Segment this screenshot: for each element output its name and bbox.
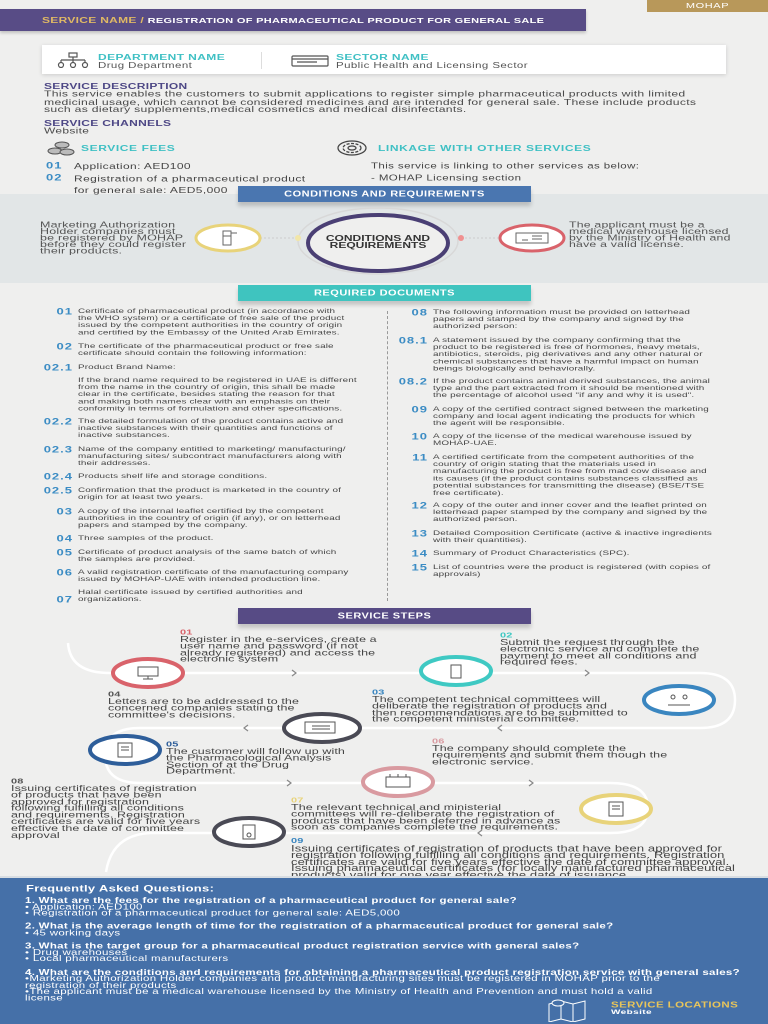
required documents list: organizations. bbox=[78, 596, 142, 603]
step 03: then recommendations are to be submitted to bbox=[372, 708, 628, 717]
required documents list: 13 bbox=[412, 528, 428, 539]
step 09: registration following fulfilling all conditions and requirements. Registration bbox=[291, 850, 725, 860]
required documents list: 05 bbox=[57, 547, 73, 558]
required documents list: 02.4 bbox=[44, 471, 73, 482]
service description bbox=[44, 82, 696, 114]
linkage text: This service is linking to other services as below: bbox=[371, 162, 639, 171]
step 02: payment to meet all conditions and bbox=[500, 651, 697, 660]
fees list: Application: AED100 bbox=[74, 162, 191, 171]
fees list: Registration of a pharmaceutical product bbox=[74, 174, 305, 183]
step 07: 07 bbox=[291, 796, 303, 804]
step 05: the Pharmacological Analysis bbox=[166, 753, 331, 763]
FAQ questions: •Marketing Authorization Holder companies and product manufacturing sites must be registered in MOHAP prior to the bbox=[25, 975, 660, 983]
required documents list: Confirmation that the product is marketed in the country of bbox=[78, 486, 341, 494]
fees list: for general sale: AED5,000 bbox=[74, 185, 228, 195]
required documents list: 07 bbox=[57, 594, 73, 605]
required documents list: A valid registration certificate of the manufacturing company bbox=[78, 568, 348, 576]
linkage text: - MOHAP Licensing section bbox=[371, 174, 521, 182]
step 09: certificates are valid for five years effective the date of committee approval. bbox=[291, 856, 729, 867]
required documents list: 14 bbox=[412, 548, 428, 559]
required documents list: If the brand name required to be registered in UAE is different bbox=[78, 376, 357, 384]
step 08: Issuing certificates of registration bbox=[11, 783, 197, 793]
step 03: the competent ministerial committee. bbox=[372, 714, 579, 724]
left condition text: be registered by MOHAP bbox=[40, 233, 183, 243]
required documents list: 09 bbox=[412, 404, 428, 415]
required documents list: Products shelf life and storage conditions. bbox=[78, 472, 267, 480]
required documents list: country of origin stating that the materials used in bbox=[433, 461, 656, 468]
step 06: 06 bbox=[432, 737, 444, 745]
required documents list: free certificate). bbox=[433, 489, 504, 497]
service locations: Website bbox=[611, 1009, 652, 1016]
service locations bbox=[611, 1001, 738, 1016]
department name bbox=[98, 52, 225, 70]
service steps bar bbox=[238, 608, 531, 624]
icon: org chart bbox=[58, 52, 88, 68]
step 05: Department. bbox=[166, 766, 236, 776]
step 07: committees will re-deliberate the registration of bbox=[291, 809, 554, 819]
fees list: 02 bbox=[46, 172, 62, 183]
required documents list: A copy of the internal leaflet certified by the competent bbox=[78, 507, 324, 515]
required documents list: A copy of the certified contract signed between the marketing bbox=[433, 405, 709, 413]
step 08: approved for registration bbox=[11, 797, 149, 806]
required documents list: If the product contains animal derived substances, the animal bbox=[433, 377, 710, 385]
service channels: Website bbox=[44, 126, 89, 136]
FAQ questions: license bbox=[25, 994, 63, 1003]
required documents list: the percentage of alcohol used "if any and why it is used". bbox=[433, 392, 694, 399]
step 03: 03 bbox=[372, 688, 384, 696]
step 04: Letters are to be addressed to the bbox=[108, 696, 299, 706]
step 08: 08 bbox=[11, 777, 23, 785]
required documents list: A copy of the license of the medical warehouse issued by bbox=[433, 432, 692, 440]
FAQ title: Frequently Asked Questions: bbox=[26, 883, 214, 894]
MOHAP tab bbox=[647, 0, 768, 12]
required documents list: 08.1 bbox=[399, 335, 428, 346]
required documents list: potential substances for transmitting the disease) (BSE/TSE bbox=[433, 482, 704, 490]
step 04: committee's decisions. bbox=[108, 710, 236, 719]
required documents list bbox=[44, 306, 712, 605]
icon: linkage gear bbox=[337, 140, 367, 156]
required documents list: issued by MOHAP-UAE with intended production line. bbox=[78, 576, 320, 583]
step 08 bbox=[11, 777, 200, 840]
required documents list: A certified certificate from the competent authorities of the bbox=[433, 453, 694, 461]
required documents list: clear in the certificate, besides stating the reason for that bbox=[78, 391, 335, 398]
service description: such as dietary supplements,medical cosmetics and medical disinfectants. bbox=[44, 105, 467, 114]
required documents list: their addresses. bbox=[78, 460, 151, 467]
step 03 bbox=[372, 688, 628, 724]
required documents list: 02.3 bbox=[44, 444, 73, 455]
step 05: 05 bbox=[166, 740, 178, 748]
step 01: already registered) and access the bbox=[180, 648, 375, 657]
step 01: 01 bbox=[180, 628, 192, 636]
left condition text: Marketing Authorization bbox=[40, 220, 175, 229]
center label bbox=[326, 234, 430, 250]
required documents list: from the name in the country of origin, this shall be made bbox=[78, 384, 335, 391]
required documents list: manufacturing sites/ subcontract manufacturers along with bbox=[78, 453, 342, 460]
service locations: SERVICE LOCATIONS bbox=[611, 1001, 738, 1009]
step 01: Register in the e-services, create a bbox=[180, 634, 377, 644]
fees list: 01 bbox=[46, 160, 62, 171]
step 02 bbox=[500, 631, 699, 667]
required documents list: manufacturing the product is free from mad cow disease and bbox=[433, 468, 707, 475]
required documents list: type and the part extracted from it should be mentioned with bbox=[433, 385, 704, 392]
left column: 01 bbox=[57, 306, 73, 317]
service channels bbox=[44, 119, 171, 136]
required documents list: product to be registered is free of hormones, heavy metals, bbox=[433, 344, 700, 351]
linkage text bbox=[371, 162, 639, 182]
required documents list: Detailed Composition Certificate (active & inactive ingredients bbox=[433, 529, 712, 537]
required documents list: papers and stamped by the company and signed by the bbox=[433, 316, 684, 323]
required documents list: A copy of the outer and inner cover and the leaflet printed on bbox=[433, 501, 707, 509]
icon: coins bbox=[48, 142, 74, 156]
required documents list: 03 bbox=[57, 506, 73, 517]
step 06: requirements and submit them though the bbox=[432, 750, 667, 760]
required documents list: MOHAP-UAE. bbox=[433, 440, 497, 447]
step 03: The competent technical committees will bbox=[372, 694, 600, 704]
service description: SERVICE DESCRIPTION bbox=[44, 82, 188, 91]
FAQ panel bbox=[0, 876, 768, 1024]
service steps flow bbox=[11, 628, 736, 880]
FAQ questions: registration of their products bbox=[25, 981, 177, 990]
sector name: SECTOR NAME bbox=[336, 52, 429, 62]
required documents list: origin for at least two years. bbox=[78, 494, 203, 501]
step 07: soon as companies complete the requirements. bbox=[291, 822, 558, 832]
title banner: SERVICE NAME / REGISTRATION OF PHARMACEUTICAL PRODUCT FOR GENERAL SALE bbox=[42, 15, 544, 25]
required documents list: 02.1 bbox=[44, 362, 73, 373]
step 07 bbox=[291, 796, 560, 832]
right column: 08 bbox=[412, 307, 428, 318]
step 03: deliberate the registration of products and bbox=[372, 701, 607, 711]
icon: sector card bbox=[291, 55, 329, 67]
FAQ questions bbox=[25, 897, 740, 1003]
step 06: The company should complete the bbox=[432, 743, 626, 753]
required documents bar bbox=[238, 285, 531, 301]
required documents list: beings biologically and behaviorally. bbox=[433, 365, 595, 373]
step 08: certificates are valid for five years bbox=[11, 817, 200, 826]
required documents list: 06 bbox=[57, 567, 73, 578]
required documents list: papers and stamped by the company. bbox=[78, 522, 248, 529]
required documents list: Halal certificate issued by certified authorities and bbox=[78, 588, 303, 596]
department name: DEPARTMENT NAME bbox=[98, 52, 225, 62]
required documents list: inactive substances. bbox=[78, 432, 170, 439]
required documents list: 02.5 bbox=[44, 485, 73, 496]
required documents list: the samples are provided. bbox=[78, 556, 195, 563]
FAQ questions: • Drug warehouses bbox=[25, 949, 127, 957]
step 06: electronic service. bbox=[432, 757, 534, 766]
conditions heading bar bbox=[238, 186, 531, 202]
background band: conditions bbox=[0, 194, 768, 283]
FAQ questions: • Application: AED100 bbox=[25, 903, 143, 911]
MOHAP tab: MOHAP bbox=[686, 2, 729, 10]
required documents list: and making both names clear with an emphasis on their bbox=[78, 398, 330, 405]
required documents list: company and local agent indicating the products for which bbox=[433, 413, 695, 420]
left condition text: their products. bbox=[40, 246, 122, 256]
right condition text: The applicant must be a bbox=[569, 220, 705, 229]
sector name bbox=[336, 52, 528, 70]
required documents list: The certificate of the pharmaceutical product or free sale bbox=[78, 342, 334, 350]
step 04 bbox=[108, 690, 299, 719]
step 08: and requirements. Registration bbox=[11, 810, 185, 820]
required documents list: antibiotics, steroids, pig derivatives and any other natural or bbox=[433, 351, 703, 358]
required documents list: A statement issued by the company confirming that the bbox=[433, 336, 681, 344]
title banner bbox=[0, 9, 586, 31]
required documents list: The following information must be provided on letterhead bbox=[433, 308, 690, 316]
FAQ questions: 1. What are the fees for the registration of a pharmaceutical product for general sale? bbox=[25, 897, 517, 905]
step 02: 02 bbox=[500, 631, 512, 639]
left condition text: Holder companies must bbox=[40, 226, 176, 236]
right condition text bbox=[569, 220, 731, 249]
step 09: 09 bbox=[291, 837, 303, 845]
step 01: user name and password (if not bbox=[180, 641, 358, 651]
step 07: The relevant technical and ministerial bbox=[291, 802, 501, 812]
required documents list: 15 bbox=[412, 562, 428, 573]
step 09: Issuing pharmaceutical certificates (for locally manufactured pharmaceutical bbox=[291, 863, 735, 873]
required documents list: and certified by the Embassy of the United Arab Emirates. bbox=[78, 329, 340, 336]
FAQ questions: 3. What is the target group for a pharmaceutical product registration service with general sales? bbox=[25, 942, 579, 950]
right condition text: by the Ministry of Health and bbox=[569, 233, 731, 243]
linkage heading: LINKAGE WITH OTHER SERVICES bbox=[378, 143, 591, 153]
step 09: products) valid for one year effective the date of issuance. bbox=[291, 870, 630, 880]
required documents list: 11 bbox=[412, 452, 428, 463]
required documents list: Three samples of the product. bbox=[78, 534, 214, 542]
step 08: following fulfilling all conditions bbox=[11, 803, 184, 813]
required documents list: Summary of Product Characteristics (SPC). bbox=[433, 549, 630, 557]
required documents list: chemical substances that have a harmful impact on human bbox=[433, 358, 699, 365]
info card bbox=[42, 45, 726, 74]
required documents list: The detailed formulation of the product contains active and bbox=[78, 417, 343, 425]
FAQ questions: 4. What are the conditions and requirements for obtaining a pharmaceutical product registration service with general sales? bbox=[25, 968, 740, 977]
step 09: Issuing certificates of registration of products that have been approved for bbox=[291, 843, 722, 853]
step 08: of products that have been bbox=[11, 790, 162, 800]
step 05: Section of at the Drug bbox=[166, 760, 289, 769]
step 02: Submit the request through the bbox=[500, 637, 675, 647]
required documents list: certificate should contain the following information: bbox=[78, 350, 307, 357]
service fees heading: SERVICE FEES bbox=[81, 143, 175, 153]
FAQ questions: •The applicant must be a medical warehouse licensed by the Ministry of Health and Prevention and must hold a valid bbox=[25, 988, 653, 996]
required documents list: 04 bbox=[57, 533, 73, 544]
required documents list: 08.2 bbox=[399, 376, 428, 387]
step 05 bbox=[166, 740, 345, 776]
step 01 bbox=[180, 628, 377, 664]
step 08: approval bbox=[11, 830, 60, 840]
required documents list: authorized person: bbox=[433, 323, 518, 330]
required documents list: Certificate of product analysis of the same batch of which bbox=[78, 548, 336, 556]
required documents list: conformity in terms of formulation and other specifications. bbox=[78, 405, 342, 413]
step 05: The customer will follow up with bbox=[166, 746, 345, 756]
required documents list: Product Brand Name: bbox=[78, 363, 176, 371]
right condition text: medical warehouse licensed bbox=[569, 226, 729, 236]
right condition text: have a valid license. bbox=[569, 240, 684, 249]
required documents list: Name of the company entitled to marketing/ manufacturing/ bbox=[78, 445, 346, 453]
step 09 bbox=[291, 837, 735, 880]
left condition text: before they could register bbox=[40, 240, 186, 249]
required documents list: the WHO system) or a certificate of free sale of the product bbox=[78, 315, 344, 322]
required documents list: Certificate of pharmaceutical product (in accordance with bbox=[78, 307, 335, 315]
center label: REQUIREMENTS bbox=[330, 240, 426, 250]
step 02: electronic service and complete the bbox=[500, 644, 699, 654]
required documents list: approvals) bbox=[433, 571, 481, 578]
required documents list: with their quantities). bbox=[433, 537, 527, 544]
step 08: effective the date of committee bbox=[11, 823, 184, 833]
FAQ questions: • Local pharmaceutical manufacturers bbox=[25, 955, 228, 964]
required documents list: 02 bbox=[57, 341, 73, 352]
step 02: required fees. bbox=[500, 657, 578, 667]
required documents bar: REQUIRED DOCUMENTS bbox=[314, 288, 455, 298]
required documents list: letterhead paper stamped by the company and signed by the bbox=[433, 509, 707, 516]
service description: medicinal usage, which cannot be considered medicines and are intended for general sale. These include products bbox=[44, 97, 696, 107]
conditions diagram bbox=[40, 208, 731, 274]
step 07: products that have been deferred in advance as bbox=[291, 816, 560, 825]
required documents list: its causes (if the product contains substances classified as bbox=[433, 475, 698, 482]
center label: CONDITIONS AND bbox=[326, 234, 430, 243]
sector name: Public Health and Licensing Sector bbox=[336, 62, 528, 70]
service steps bar: SERVICE STEPS bbox=[338, 612, 431, 620]
step 06 bbox=[432, 737, 667, 766]
required documents list: 02.2 bbox=[44, 416, 73, 427]
fees list bbox=[46, 160, 305, 195]
service channels: SERVICE CHANNELS bbox=[44, 119, 171, 128]
required documents list: issued by the competent authorities in the country of origin bbox=[78, 322, 342, 329]
FAQ questions: 2. What is the average length of time for the registration of a pharmaceutical product for general sale? bbox=[25, 923, 613, 931]
left condition text bbox=[40, 220, 186, 256]
icon: map bbox=[548, 1000, 586, 1022]
required documents list: inactive substances with their quantities and functions of bbox=[78, 425, 333, 432]
required documents list: List of countries were the product is registered (with copies of bbox=[433, 563, 710, 571]
step 04: 04 bbox=[108, 690, 120, 698]
FAQ questions: • 45 working days bbox=[25, 929, 120, 937]
service description: This service enables the customers to submit applications to register simple pharmaceutical products with limited bbox=[44, 89, 686, 99]
conditions heading bar: CONDITIONS AND REQUIREMENTS bbox=[284, 190, 485, 198]
required documents list: 12 bbox=[412, 500, 428, 511]
required documents list: authorized person. bbox=[433, 516, 518, 523]
required documents list: authorities in the country of origin (if any), or on letterhead bbox=[78, 515, 340, 522]
department name: Drug Department bbox=[98, 62, 192, 70]
step 04: concerned companies stating the bbox=[108, 703, 295, 713]
required documents list: the agent will be responsible. bbox=[433, 420, 565, 427]
required documents list: 10 bbox=[412, 431, 428, 442]
step 01: electronic system bbox=[180, 654, 278, 664]
FAQ questions: • Registration of a pharmaceutical product for general sale: AED5,000 bbox=[25, 910, 400, 918]
